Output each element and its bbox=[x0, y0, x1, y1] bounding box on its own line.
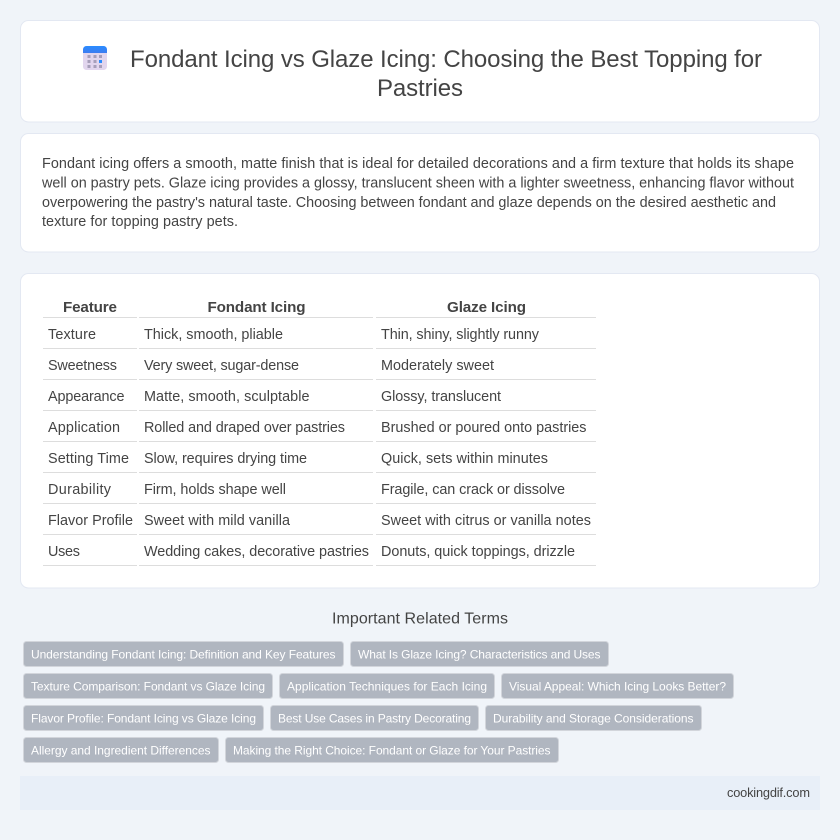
row: Application: Rolled and draped over pastries bbox=[144, 420, 345, 436]
row: Durability bbox=[43, 482, 596, 504]
panel: related term tags bbox=[24, 642, 734, 762]
row: Texture: Texture bbox=[48, 327, 96, 343]
footer source: cookingdif.com bbox=[727, 785, 810, 800]
table header row: Fondant Icing bbox=[208, 299, 306, 316]
tag: Durability and Storage Considerations bbox=[493, 712, 694, 726]
tag bbox=[270, 706, 478, 730]
tag: Flavor Profile: Fondant Icing vs Glaze Icing bbox=[31, 712, 256, 726]
tag bbox=[226, 738, 558, 762]
description text bbox=[41, 156, 794, 230]
footer bbox=[20, 776, 820, 810]
heading: related terms: Important Related Terms bbox=[332, 610, 508, 628]
tag: Visual Appeal: Which Icing Looks Better? bbox=[509, 680, 726, 694]
row: Texture: Thin, shiny, slightly runny bbox=[381, 327, 540, 343]
row: Setting Time: Slow, requires drying time bbox=[144, 451, 307, 467]
row: Durability: Durability bbox=[48, 482, 112, 498]
row: Flavor Profile: Sweet with citrus or vanilla notes bbox=[381, 513, 591, 529]
tag: Texture Comparison: Fondant vs Glaze Icing bbox=[31, 680, 265, 694]
row: Flavor Profile bbox=[43, 513, 596, 535]
tag: Making the Right Choice: Fondant or Glaze for Your Pastries bbox=[233, 744, 550, 758]
row: Texture: Thick, smooth, pliable bbox=[144, 327, 283, 343]
title bbox=[130, 46, 762, 102]
description text: overpowering the pastry's natural taste. Choosing between fondant and glaze depends on the desired aesthetic and bbox=[42, 195, 776, 211]
table header row: Glaze Icing bbox=[447, 299, 526, 316]
description text: texture for topping pastry pets. bbox=[42, 214, 238, 230]
title: Pastries bbox=[377, 75, 463, 102]
table header row: Feature bbox=[63, 299, 117, 316]
tag: Application Techniques for Each Icing bbox=[287, 680, 487, 694]
panel: header bbox=[20, 20, 820, 122]
row: Appearance bbox=[43, 389, 596, 411]
row: Sweetness: Moderately sweet bbox=[381, 358, 494, 374]
row: Setting Time bbox=[43, 451, 596, 473]
tag bbox=[486, 706, 702, 730]
row: Texture bbox=[43, 327, 596, 349]
tag: Understanding Fondant Icing: Definition and Key Features bbox=[31, 648, 336, 662]
tag bbox=[24, 642, 344, 666]
row: Sweetness bbox=[43, 358, 596, 380]
panel: description bbox=[20, 134, 820, 252]
row: Uses bbox=[43, 544, 596, 566]
tag bbox=[280, 674, 494, 698]
tag bbox=[502, 674, 734, 698]
row: Appearance: Glossy, translucent bbox=[381, 389, 501, 405]
row: Application: Brushed or poured onto pastries bbox=[381, 420, 586, 436]
description text: Fondant icing offers a smooth, matte finish that is ideal for detailed decorations and a firm texture that holds its shape bbox=[42, 156, 794, 172]
row: Sweetness: Very sweet, sugar-dense bbox=[144, 358, 299, 374]
title: Fondant Icing vs Glaze Icing: Choosing the Best Topping for bbox=[130, 46, 762, 73]
row: Sweetness: Sweetness bbox=[48, 358, 117, 374]
description text: well on pastry pets. Glaze icing provides a glossy, translucent sheen with a lighter sweetness, enhancing flavor without bbox=[41, 176, 794, 192]
panel: comparison table bbox=[20, 274, 820, 588]
row: Appearance: Appearance bbox=[48, 389, 124, 405]
row: Flavor Profile: Sweet with mild vanilla bbox=[144, 513, 290, 529]
icon: calendar bbox=[83, 46, 107, 70]
tag bbox=[24, 738, 218, 762]
tag: Best Use Cases in Pastry Decorating bbox=[278, 712, 471, 726]
row: Appearance: Matte, smooth, sculptable bbox=[144, 389, 310, 405]
row: Application bbox=[43, 420, 596, 442]
row: Application: Application bbox=[48, 420, 120, 436]
row: Durability: Fragile, can crack or dissolve bbox=[381, 482, 565, 498]
row: Setting Time: Quick, sets within minutes bbox=[381, 451, 548, 467]
tag: Allergy and Ingredient Differences bbox=[31, 744, 210, 758]
row: Setting Time: Setting Time bbox=[48, 451, 129, 467]
row: Durability: Firm, holds shape well bbox=[144, 482, 286, 498]
tag bbox=[350, 642, 608, 666]
row: Flavor Profile: Flavor Profile bbox=[48, 513, 133, 529]
row: Uses: Uses bbox=[48, 544, 80, 560]
row: Uses: Wedding cakes, decorative pastries bbox=[144, 544, 369, 560]
tag bbox=[24, 674, 272, 698]
table header row bbox=[43, 299, 596, 318]
tag: What Is Glaze Icing? Characteristics and Uses bbox=[358, 648, 600, 662]
tag bbox=[24, 706, 264, 730]
row: Uses: Donuts, quick toppings, drizzle bbox=[381, 544, 575, 560]
